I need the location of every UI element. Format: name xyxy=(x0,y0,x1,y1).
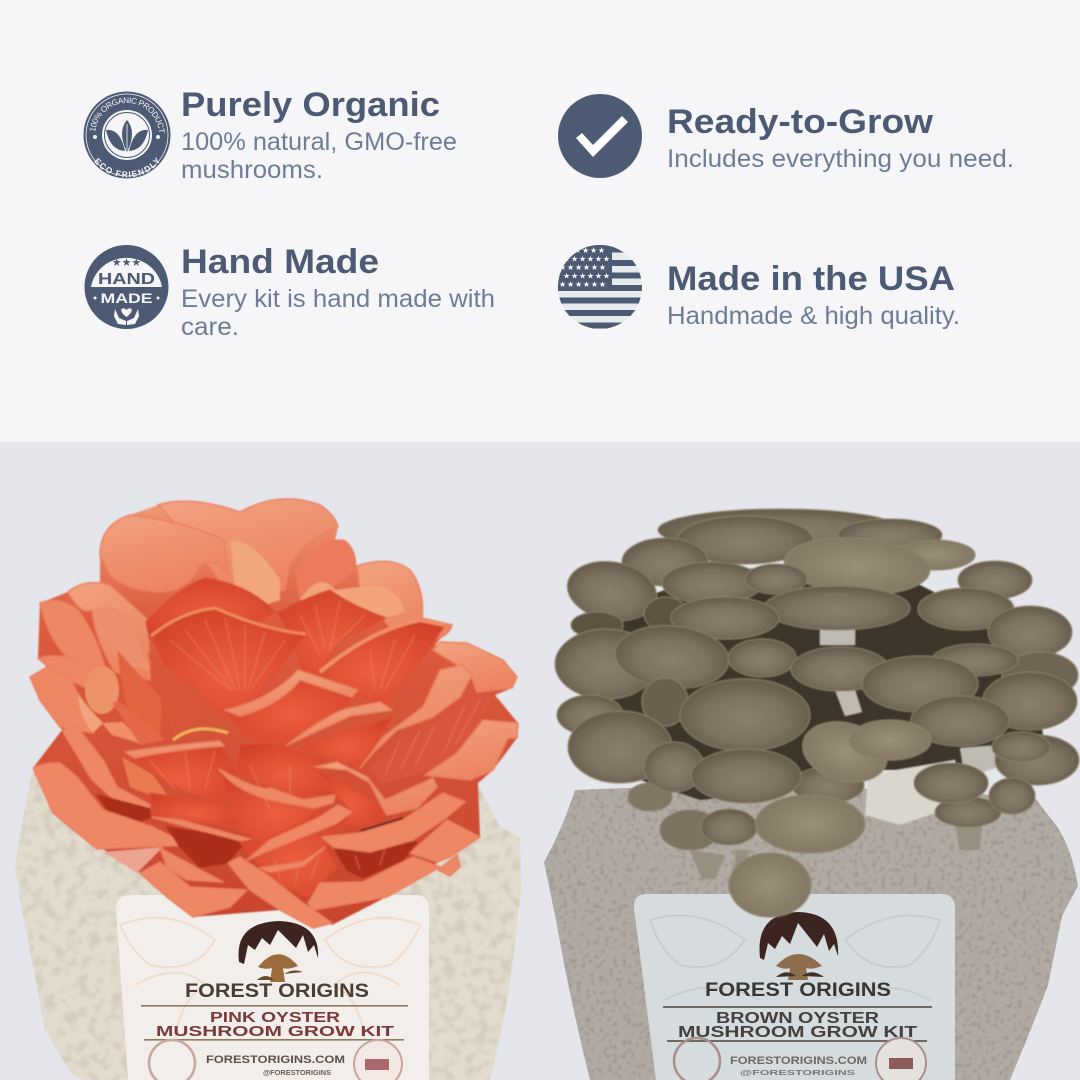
label: pink oyster: FOREST ORIGINS xyxy=(185,981,369,1002)
label: brown oyster xyxy=(634,894,955,1080)
description: natural GMO-free xyxy=(181,128,457,184)
description: handmade high quality: Handmade & high quality. xyxy=(667,302,960,330)
right lower petals xyxy=(335,842,417,878)
feature: Purely Organic xyxy=(84,86,457,184)
upper gill funnels xyxy=(146,578,275,640)
icon: check mark xyxy=(558,94,642,178)
icon: american flag: ★★★★ xyxy=(574,246,606,255)
grow bag: brown xyxy=(544,786,1078,1080)
label: pink oyster xyxy=(116,895,429,1080)
heading: Purely Organic: Purely Organic xyxy=(181,86,440,124)
logo: forest origins mountain mark xyxy=(238,921,318,982)
icon: eco friendly badge: ECO FRIENDLY xyxy=(94,157,160,178)
feature: Ready-to-Grow xyxy=(558,94,1014,178)
left cluster xyxy=(117,650,162,740)
description: includes everything: Includes everything you need. xyxy=(667,145,1014,173)
description: hand made with care: Every kit is hand made with xyxy=(181,285,495,313)
icon: eco friendly badge: 100% ORGANIC PRODUCT xyxy=(90,97,165,133)
description: hand made with care xyxy=(181,285,495,341)
label: brown oyster: MUSHROOM GROW KIT xyxy=(678,1024,918,1041)
cluster silhouette xyxy=(30,499,518,925)
heading: Made in the USA: Made in the USA xyxy=(667,260,955,298)
label: pink oyster: MUSHROOM GROW KIT xyxy=(156,1023,394,1040)
top panel background xyxy=(0,0,1080,442)
icon: hand made badge: HAND xyxy=(98,271,155,288)
description: hand made with care: care. xyxy=(181,313,239,341)
description: natural GMO-free: mushrooms. xyxy=(181,156,323,184)
label: brown oyster: FORESTORIGINS.COM xyxy=(730,1055,867,1067)
product: pink oyster grow kit xyxy=(15,499,521,1080)
label: brown oyster: FOREST ORIGINS xyxy=(705,980,891,1001)
grow bag: pink xyxy=(15,760,521,1080)
feature: Made in the USA xyxy=(558,245,960,330)
gill lines xyxy=(150,600,480,885)
mushroom cluster: pink oyster xyxy=(30,499,518,928)
icon: hand made badge: ★★★ xyxy=(112,256,141,269)
icon: american flag xyxy=(558,245,642,329)
lower left petals xyxy=(62,727,160,810)
icon: hand made badge: MADE xyxy=(100,290,152,306)
mushroom cluster: brown oyster xyxy=(555,509,1079,917)
center and right gills xyxy=(225,670,358,743)
lower gills xyxy=(236,743,333,797)
icon: hand made badge xyxy=(84,245,168,329)
label: brown oyster: BROWN OYSTER xyxy=(716,1010,879,1027)
icon: american flag: ★★★★★★ xyxy=(563,272,611,280)
icon: american flag: ★★★★★★ xyxy=(559,280,607,289)
label: pink oyster: FORESTORIGINS.COM xyxy=(206,1054,345,1066)
product: brown oyster grow kit xyxy=(544,509,1079,1080)
icon: eco friendly badge xyxy=(84,92,170,178)
icon: american flag: ★★★★★★ xyxy=(559,263,607,272)
icon: american flag: ★★★★★★ xyxy=(563,254,611,264)
feature: Hand Made xyxy=(84,243,495,341)
central lower funnels xyxy=(220,770,335,845)
label: pink oyster: PINK OYSTER xyxy=(210,1009,340,1026)
logo: forest origins mountain mark xyxy=(759,912,838,980)
label: pink oyster: @FORESTORIGINS xyxy=(263,1070,331,1077)
label: brown oyster: @FORESTORIGINS xyxy=(740,1070,856,1077)
description: natural GMO-free: 100% natural, GMO-free xyxy=(181,128,457,156)
heading: Hand Made: Hand Made xyxy=(181,243,379,281)
bottom panel background xyxy=(0,442,1080,1080)
heading: Ready-to-Grow: Ready-to-Grow xyxy=(667,103,934,141)
